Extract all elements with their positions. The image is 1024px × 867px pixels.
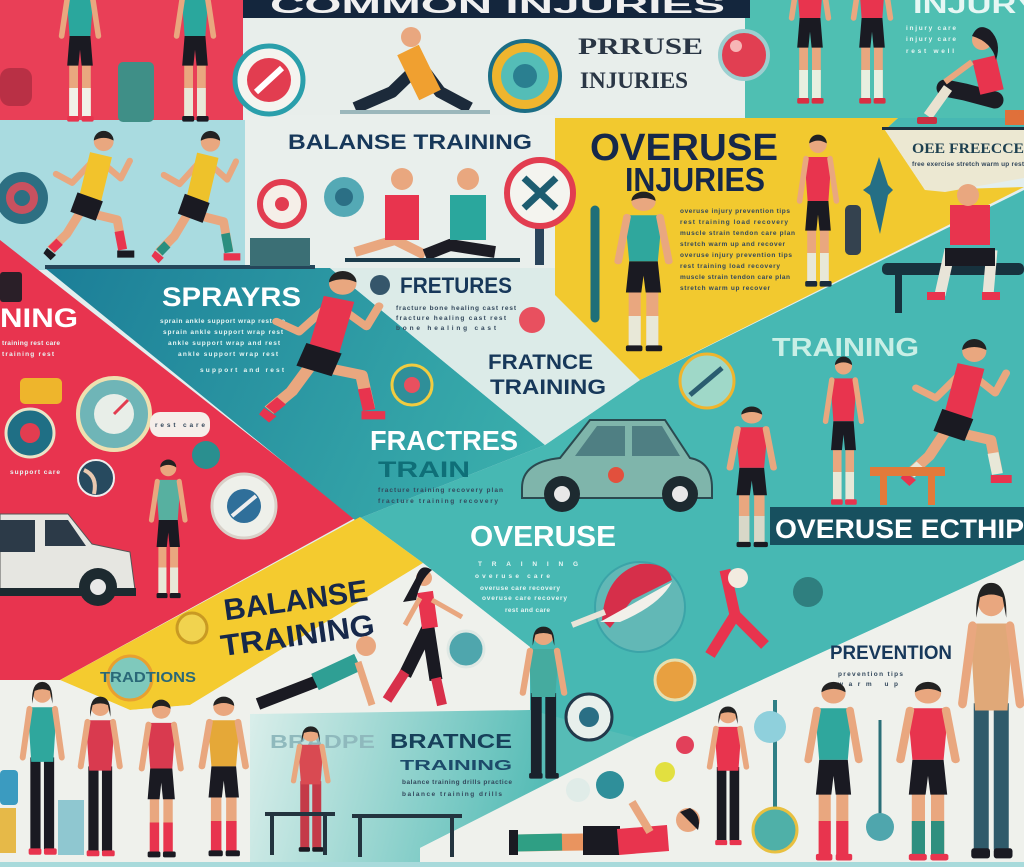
heading: balance training drills <box>402 791 502 798</box>
heading: fractures training <box>370 425 518 482</box>
icon: dark tag <box>0 272 22 302</box>
panel: balance training bottom <box>265 726 512 857</box>
fractures text: bone healing cast <box>396 325 497 332</box>
red panel text: support care <box>10 469 60 476</box>
figure: coach <box>294 726 328 852</box>
top left players <box>0 0 213 122</box>
figure: teal coach <box>151 441 220 598</box>
runners <box>43 131 315 269</box>
sprains text: sprain ankle support wrap rest ice <box>160 318 285 325</box>
icon: magnifier badge <box>680 354 734 408</box>
banner: balance training: TRAINING <box>219 609 377 663</box>
sprains text: ankle support wrap rest <box>178 351 279 358</box>
heading: nining: NING <box>0 303 78 333</box>
heading: balance training: BALANSE TRAINING <box>288 131 532 154</box>
banner: balance training <box>214 574 377 663</box>
body text: overuse injury prevention tips <box>680 208 790 215</box>
car illustration <box>522 420 712 512</box>
heading: fractures training: TRAIN <box>378 457 470 482</box>
icon: knee brace <box>845 157 893 255</box>
heading: TRAINING <box>400 757 512 774</box>
icon: blocked circle <box>212 474 276 538</box>
sprains text: support and rest <box>200 367 285 374</box>
fractures text: fracture bone healing cast rest <box>396 305 517 312</box>
banner: overuse: OVERUSE ECTHIP <box>775 514 1024 544</box>
figure: lying athlete <box>509 802 700 855</box>
fractures text <box>396 305 517 332</box>
overuse text <box>475 561 578 614</box>
sprains text: ankle support wrap and rest <box>168 340 281 347</box>
figure: teal athlete <box>618 192 669 351</box>
heading: fracture training: TRAINING <box>490 376 606 399</box>
icon: target left <box>0 172 48 224</box>
injury text: injury care <box>906 25 956 32</box>
small icons <box>566 736 694 802</box>
heading: fractures: FRETURES <box>400 273 512 298</box>
icon: pin <box>370 275 545 333</box>
heading: fractures training: FRACTRES <box>370 425 518 456</box>
body text: overuse injury prevention tips <box>680 252 792 259</box>
body text: stretch warm up and recover <box>680 241 785 248</box>
heading <box>270 731 512 798</box>
icon: racket <box>866 720 894 841</box>
heading: pre-use injuries: PRRUSE <box>578 34 703 59</box>
heading: traditions: TRADTIONS <box>100 669 196 686</box>
nining text: training rest care <box>2 340 60 347</box>
heading: OVERUSE <box>590 127 778 169</box>
banner: balance training: BALANSE <box>222 574 370 627</box>
icon: hazard badge <box>655 577 823 700</box>
icon: teal badge <box>324 177 364 217</box>
truck illustration <box>0 514 136 606</box>
nining text <box>2 340 60 358</box>
benches <box>265 814 462 857</box>
body text: rest training load recovery <box>680 263 780 270</box>
figure: fallen athlete <box>710 568 765 655</box>
top centre seated figure <box>340 27 490 114</box>
icon: target dial <box>490 41 560 111</box>
heading: fracture training <box>488 351 606 399</box>
fractures training text: fracture training recovery <box>378 498 498 505</box>
panel: overuse injuries <box>590 127 836 351</box>
figure: red athlete <box>800 135 836 287</box>
icon: stick gauge <box>753 700 797 852</box>
icon: yellow kit <box>20 378 62 404</box>
overuse heading: OVERUSE <box>470 521 616 553</box>
icon: heart dial <box>6 409 54 457</box>
body text: rest training load recovery <box>680 219 788 226</box>
icon: gauge <box>78 378 150 450</box>
prevention figures <box>710 583 1020 860</box>
heading <box>590 127 778 198</box>
figure: walking woman <box>387 567 462 705</box>
icon: red badge <box>260 182 304 226</box>
fractures training text: fracture training recovery plan <box>378 487 503 494</box>
heading: BRATNCE <box>390 731 512 753</box>
top right players <box>792 0 890 104</box>
prevention text: prevention tips <box>838 671 903 678</box>
icon: red ball <box>720 31 768 79</box>
figure: plank <box>258 636 376 705</box>
standing group <box>0 682 246 857</box>
icon: crutch <box>590 210 600 318</box>
heading: training: TRAINING <box>772 332 919 362</box>
heading: fracture training: FRATNCE <box>488 351 593 374</box>
heading: sprains: SPRAYRS <box>162 282 301 312</box>
prevention text <box>837 671 903 688</box>
heading: INJURIES <box>625 161 765 198</box>
heading: pre-use injuries: INJURIES <box>580 68 688 93</box>
injury text: injury care <box>906 36 956 43</box>
title banner <box>243 0 750 19</box>
icon: heart badge <box>392 365 432 405</box>
body text <box>680 208 795 292</box>
overuse text: overuse care recovery <box>480 585 560 592</box>
icon: stop sign <box>507 160 573 265</box>
icon: ball <box>78 460 114 496</box>
overuse text: rest and care <box>505 607 550 614</box>
callout: rest care <box>155 422 205 429</box>
sprains text <box>160 318 285 374</box>
seated pair <box>345 168 520 262</box>
seated woman stretching <box>917 27 1024 125</box>
prevention text: warm up <box>837 681 898 688</box>
heading: free exercise: OEE FREECCE <box>912 141 1024 157</box>
icon: prohibited sign <box>235 46 303 114</box>
fractures text: fracture healing cast rest <box>396 315 507 322</box>
bench and sitting player <box>882 184 1024 313</box>
overuse text: overuse care recovery <box>482 595 567 602</box>
free exercise text: free exercise stretch warm up rest <box>912 161 1024 168</box>
figure: red runner <box>259 271 385 422</box>
callout <box>150 412 210 437</box>
injury text: rest well <box>906 48 954 55</box>
fractures training text <box>378 487 503 505</box>
overuse text: overuse care <box>475 573 550 580</box>
heading: prevention: PREVENTION <box>830 643 952 664</box>
body text: muscle strain tendon care plan <box>680 230 795 237</box>
body text: stretch warm up recover <box>680 285 770 292</box>
icon: dial <box>566 694 612 740</box>
sprains text: sprain ankle support wrap rest <box>163 329 284 336</box>
figure: teal man <box>523 627 564 779</box>
icon: teal disc <box>448 631 484 667</box>
overuse text: TRAINING <box>478 561 578 568</box>
icon: shoe badge <box>572 562 685 652</box>
injury text <box>906 25 956 55</box>
heading: balance training drills practice <box>402 779 512 786</box>
heading: pre-use injuries <box>578 34 703 93</box>
nining text: training rest <box>2 351 55 358</box>
body text: muscle strain tendon care plan <box>680 274 790 281</box>
icon: yellow medal <box>108 613 207 700</box>
training athletes <box>730 339 1012 547</box>
heading: BRADPE <box>270 732 375 752</box>
